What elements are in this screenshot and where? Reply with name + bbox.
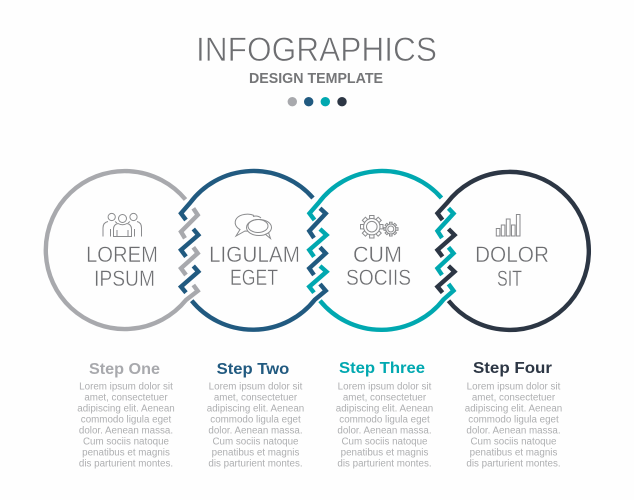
step two text: penatibus et magnis	[212, 448, 299, 458]
step one text: dis parturient montes.	[79, 458, 173, 470]
label: ligulam eget: EGET	[230, 265, 278, 290]
step one text: commodo ligula eget	[81, 414, 171, 426]
step three text: penatibus et magnis	[341, 448, 428, 458]
ring one, gray	[46, 171, 198, 329]
ring two, blue	[181, 171, 326, 330]
step three heading: Step Three	[339, 360, 425, 377]
step four text: Lorem ipsum dolor sit	[467, 382, 561, 392]
step three text: commodo ligula eget	[339, 414, 430, 426]
step one heading: Step One	[89, 361, 160, 378]
step one text: amet, consectetuer	[84, 392, 168, 404]
label: lorem ipsum: IPSUM	[94, 266, 155, 291]
icon: people	[103, 213, 142, 236]
icon: bar chart	[496, 214, 520, 236]
step two text: Lorem ipsum dolor sit	[209, 382, 303, 392]
step two text: amet, consectetuer	[214, 392, 298, 404]
step three text	[336, 382, 433, 470]
step two text: dis parturient montes.	[208, 458, 303, 470]
dots	[288, 97, 347, 106]
label: lorem ipsum	[86, 242, 158, 291]
step one text: Lorem ipsum dolor sit	[79, 382, 173, 392]
step four text: adipiscing elit. Aenean	[465, 404, 562, 414]
step four text	[465, 382, 562, 470]
ring four, dark	[438, 172, 589, 330]
step four text: Cum sociis natoque	[470, 436, 557, 448]
step two text: commodo ligula eget	[210, 414, 301, 426]
title: INFOGRAPHICS	[196, 31, 437, 69]
ring three, teal	[309, 171, 454, 330]
label: lorem ipsum: LOREM	[86, 242, 158, 267]
label: cum sociis: SOCIIS	[346, 265, 411, 290]
label: dolor sit	[475, 242, 549, 291]
step three text: adipiscing elit. Aenean	[336, 404, 433, 414]
step three text: dolor. Aenean massa.	[337, 426, 432, 436]
step four heading: Step Four	[473, 360, 552, 377]
step two text: Cum sociis natoque	[212, 436, 299, 448]
step one text: Cum sociis natoque	[83, 436, 170, 448]
step four text: dis parturient montes.	[466, 458, 561, 470]
label: cum sociis: CUM	[353, 242, 402, 267]
step three text: Lorem ipsum dolor sit	[338, 382, 432, 392]
step three text: dis parturient montes.	[337, 458, 432, 470]
label: dolor sit: DOLOR	[475, 242, 549, 267]
step one text: penatibus et magnis	[82, 448, 170, 458]
step four text: penatibus et magnis	[470, 448, 557, 458]
step two text	[207, 382, 304, 470]
step three text: Cum sociis natoque	[341, 436, 428, 448]
step four text: dolor. Aenean massa.	[466, 426, 561, 436]
label: ligulam eget	[209, 242, 300, 290]
icon: chat bubbles	[235, 214, 272, 238]
step four text: commodo ligula eget	[468, 414, 559, 426]
icon: gears	[360, 216, 398, 238]
label: ligulam eget: LIGULAM	[209, 242, 300, 267]
step one text	[77, 382, 175, 470]
step three text: amet, consectetuer	[343, 392, 427, 404]
step one text: adipiscing elit. Aenean	[77, 404, 175, 414]
label: cum sociis	[346, 242, 411, 290]
subtitle: DESIGN TEMPLATE	[249, 71, 383, 87]
step one text: dolor. Aenean massa.	[79, 426, 173, 436]
label: dolor sit: SIT	[497, 266, 522, 291]
step two text: adipiscing elit. Aenean	[207, 404, 304, 414]
step two heading: Step Two	[217, 361, 289, 378]
step two text: dolor. Aenean massa.	[208, 426, 303, 436]
step four text: amet, consectetuer	[472, 392, 556, 404]
